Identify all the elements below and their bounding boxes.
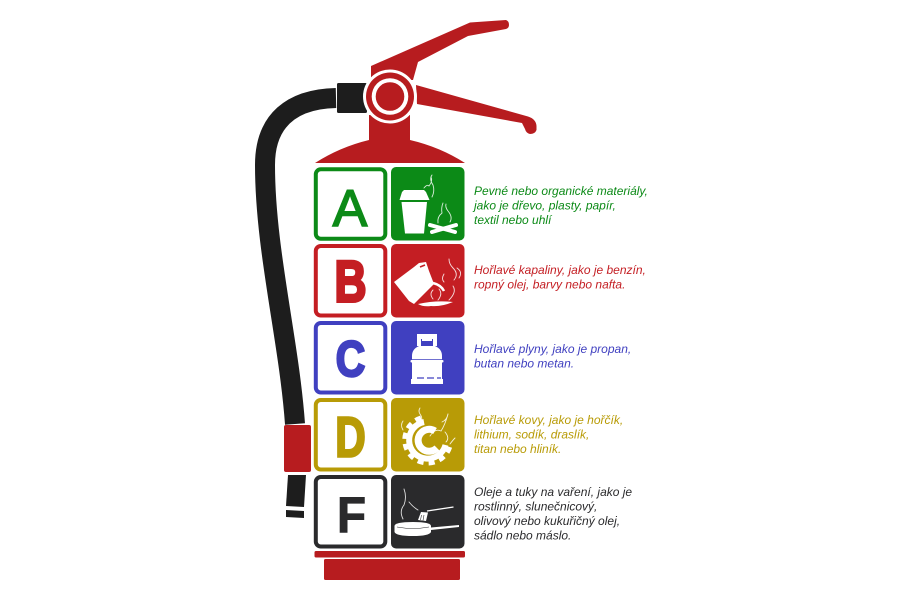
extinguisher head and levers: [315, 20, 536, 163]
class F letter box: F: [337, 488, 366, 543]
class D description: titan nebo hliník.: [474, 442, 561, 456]
class C letter box: [316, 323, 385, 392]
class A description: jako je dřevo, plasty, papír,: [472, 198, 616, 212]
class D letter box: [316, 400, 385, 470]
class C row: [316, 321, 631, 394]
class F description: rostlinný, slunečnicový,: [474, 500, 597, 514]
class D description: lithium, sodík, draslík,: [474, 428, 589, 442]
class B description: Hořlavé kapaliny, jako je benzín,: [474, 263, 646, 277]
class B row: [316, 244, 646, 318]
class D icon: gear and burning metal: [391, 398, 464, 472]
class C letter box: C: [336, 331, 365, 387]
class D description: Hořlavé kovy, jako je hořčík,: [474, 413, 623, 427]
class F description: Oleje a tuky na vaření, jako je: [474, 485, 632, 499]
class D letter box: D: [335, 406, 366, 469]
class C description: Hořlavé plyny, jako je propan,: [474, 342, 631, 356]
class A letter box: A: [333, 180, 368, 238]
class F description: sádlo nebo máslo.: [474, 528, 571, 542]
class F row: [316, 475, 632, 548]
class A row: [316, 167, 648, 240]
class D row: [316, 398, 623, 472]
class B icon: canister pouring liquid: [391, 244, 464, 318]
class B description: ropný olej, barvy nebo nafta.: [474, 278, 625, 292]
extinguisher hose: [265, 83, 367, 518]
class C icon: gas cylinder: [391, 321, 464, 394]
class B letter box: [316, 246, 385, 316]
class F letter box: [316, 477, 385, 546]
class B letter box: B: [334, 250, 367, 315]
class A icon: bucket and campfire: [391, 167, 464, 240]
class C description: butan nebo metan.: [474, 356, 574, 370]
class A description: Pevné nebo organické materiály,: [474, 184, 648, 198]
extinguisher base: [314, 551, 465, 580]
class F icon: frying pan and spatula: [391, 475, 464, 548]
class A description: textil nebo uhlí: [474, 213, 553, 227]
class A letter box: [316, 169, 385, 239]
class F description: olivový nebo kukuřičný olej,: [474, 514, 620, 528]
